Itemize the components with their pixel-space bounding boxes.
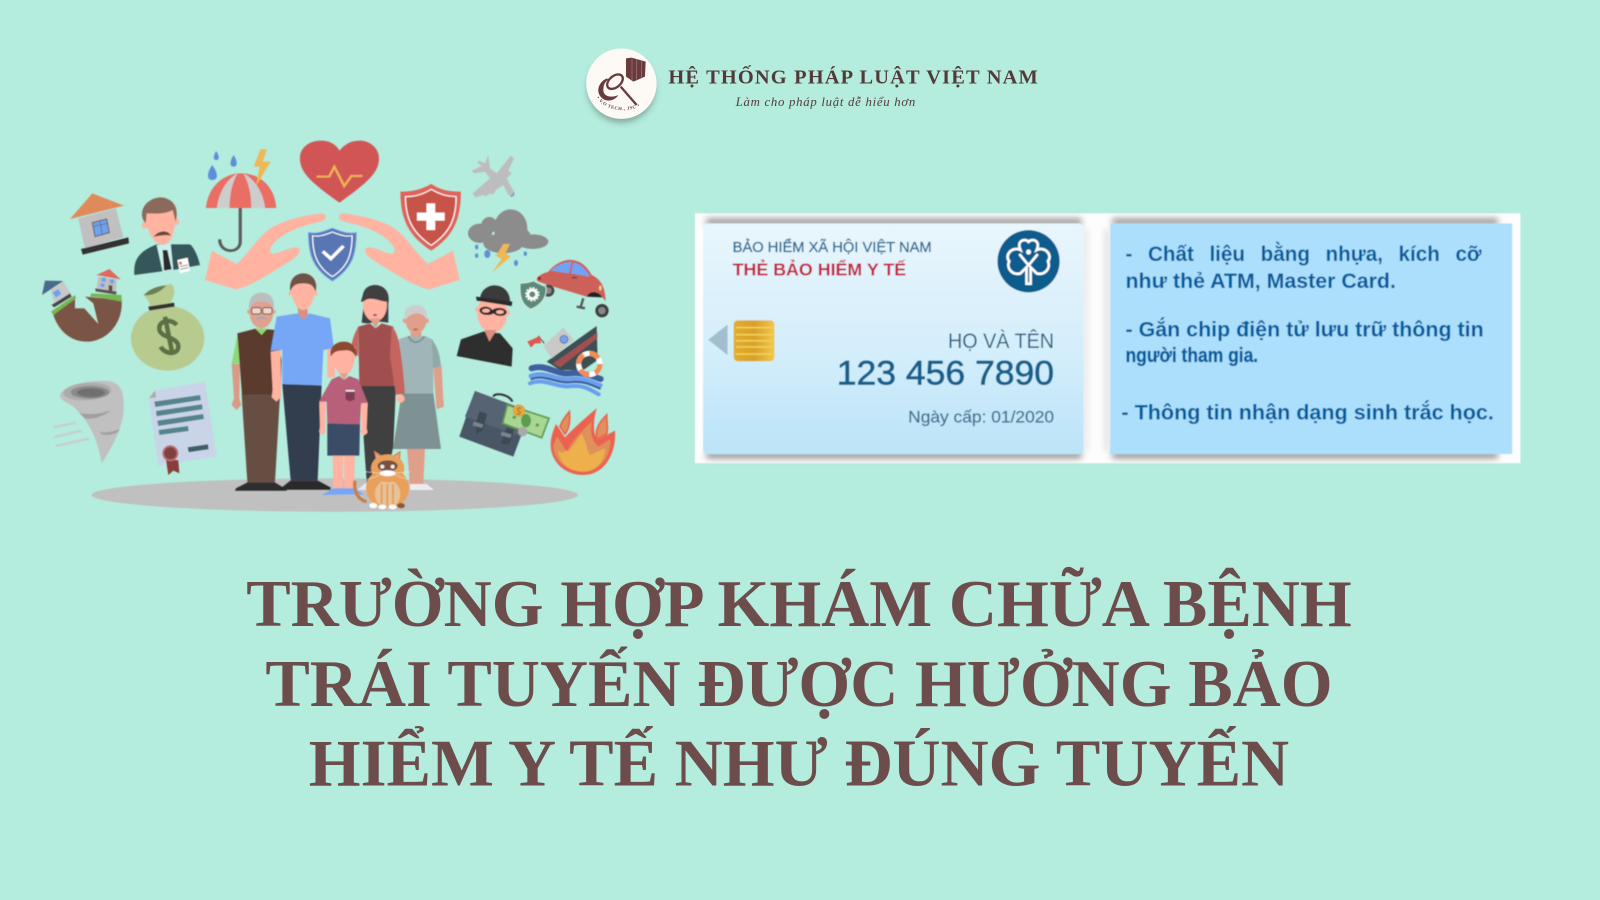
icon: car wheel and jack [577,298,609,317]
feature: material [1126,241,1482,293]
image backdrop [695,213,1520,463]
cat [355,451,410,509]
icon: thief [457,285,513,367]
father [271,273,335,490]
card title: THẺ BẢO HIỂM Y TẾ [733,260,906,280]
card issuer: BẢO HIỂM XÃ HỘI VIỆT NAM [733,238,932,256]
icon: sinking ship [527,326,601,394]
insurance illustration [42,141,615,512]
main title [246,566,1352,801]
logo badge: • V.O TECH., JSC • [598,96,639,111]
ground shadow [92,478,578,512]
icon: umbrella [206,149,276,251]
icon: gear shield [520,281,546,309]
son [319,342,368,495]
right column upper icons [468,155,606,309]
feature: chip: - Gắn chip điện tử lưu trữ thông tin [1126,317,1484,342]
icon: social insurance logo [997,230,1060,292]
feature: material: - Chất liệu bằng nhựa, kích cỡ [1126,241,1482,266]
panel: card front [703,223,1084,454]
card holder name: HỌ VÀ TÊN [948,328,1054,353]
grandmother [391,305,444,490]
card shadows [706,218,1498,458]
tagline: Làm cho pháp luật dễ hiểu hơn [735,95,915,109]
main title: TRƯỜNG HỢP KHÁM CHỮA BỆNH [246,566,1352,641]
site name: HỆ THỐNG PHÁP LUẬT VIỆT NAM [668,65,1038,89]
right column lower icons [457,285,615,475]
icon: agent [134,197,200,275]
mother [351,285,405,490]
grandfather [232,293,287,491]
left column icons [42,193,217,475]
icon: storm cloud [468,209,548,272]
protection icons and ground [92,141,578,512]
icon: medical shield [400,184,461,251]
icon: tornado [53,381,124,463]
icon: broken car [537,260,606,301]
main title: TRÁI TUYẾN ĐƯỢC HƯỞNG BẢO [265,645,1333,721]
icon: heart [300,141,379,203]
card number: 123 456 7890 [837,355,1054,393]
icon: briefcase and cash [459,391,549,457]
main title: HIỂM Y TẾ NHƯ ĐÚNG TUYẾN [309,725,1289,801]
icon: airplane [472,155,514,197]
feature: chip [1126,317,1484,367]
health insurance card image [695,213,1520,463]
icon: chip [734,320,774,361]
icon: blue shield [309,228,356,281]
family group [232,273,444,509]
panel: card features [1110,223,1512,454]
feature: material: như thẻ ATM, Master Card. [1126,269,1396,293]
icon: fire [551,408,615,475]
header logo and site name [584,48,1038,126]
feature: chip: người tham gia. [1126,345,1258,367]
feature: biometrics: - Thông tin nhận dạng sinh trắc học. [1121,399,1494,424]
icon: contract document [149,382,217,475]
icon: chip arrow [708,324,728,355]
icon: money bag [131,284,204,371]
logo badge [584,48,659,126]
icon: house [70,193,129,255]
icon: protecting hands [205,213,460,289]
icon: earthquake [42,269,122,342]
issue date: Ngày cấp: 01/2020 [908,408,1054,426]
